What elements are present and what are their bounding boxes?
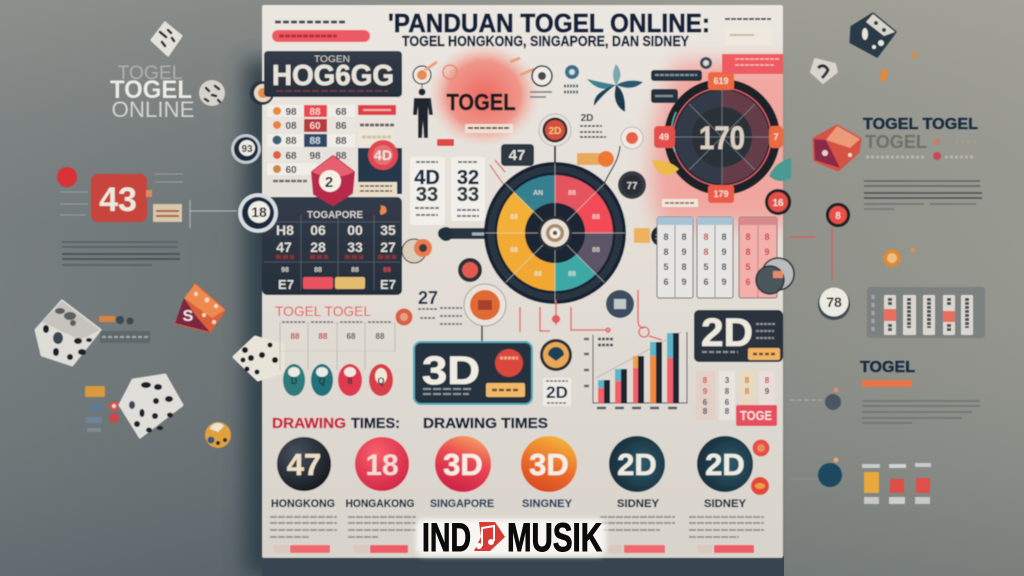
table mid: 9: [721, 277, 727, 287]
text blocks: column descriptions: [270, 517, 764, 537]
panel: dark TOGAPORE grid: 35: [380, 222, 396, 238]
heading: togel online: TOGEL: [118, 63, 182, 84]
circle: 2D sidney: [609, 436, 665, 510]
panel: dark TOGAPORE grid: E7: [380, 277, 396, 292]
circle: 2D sidney second: 2D: [705, 447, 745, 482]
title: TOGEL HONGKONG, SINGAPORE, DAN SIDNEY: [402, 33, 689, 50]
chart: four column balls: [280, 322, 395, 396]
table: number rows: 68: [335, 107, 347, 118]
chart: main wheel: 88: [592, 214, 600, 221]
text block: lower right: [862, 401, 980, 423]
table pink: 9: [764, 247, 770, 257]
callout: 43 red block: [57, 167, 237, 228]
panel: dark TOGAPORE grid: E7: [278, 277, 294, 292]
heading: togel right lower: TOGEL: [860, 359, 915, 376]
icon: red die with 2: [312, 156, 354, 205]
button: TOGE: [736, 405, 777, 426]
table mid: 8: [703, 247, 709, 257]
heading: drawing times 1: [272, 415, 400, 432]
icon: small orange die: [205, 422, 231, 448]
chart: four column balls: 88: [319, 332, 328, 341]
icon: red die right: [814, 126, 860, 170]
table pink: 8: [764, 232, 770, 242]
table mid: 8: [721, 262, 727, 272]
chart: four column balls: 68: [347, 332, 356, 341]
table: number rows: 86: [335, 121, 347, 132]
icon: ball 18 with connector: 18: [251, 204, 267, 220]
small label strip: [99, 316, 150, 343]
text block: 2D note: [580, 113, 606, 137]
circle: 3D singapore: SINGAPORE: [430, 498, 494, 510]
title: 'PANDUAN TOGEL ONLINE:: [388, 8, 710, 38]
badge: 2D ball with card: 2D: [546, 383, 568, 402]
chart: main wheel: 88: [568, 271, 576, 278]
circle: 47 hongkong: 47: [287, 447, 321, 482]
icon: navy die: [851, 14, 895, 56]
table: number rows: 08: [285, 121, 297, 132]
panel: dark TOGAPORE grid: [262, 197, 402, 295]
circle: 2D sidney: SIDNEY: [617, 498, 660, 510]
chart: red dial: [664, 79, 780, 195]
panel: 2D dark: 2D: [701, 311, 753, 355]
card: 4D 33: [410, 157, 445, 225]
card: 32 33: 32: [457, 167, 479, 189]
icon: red ball right column: [790, 203, 850, 280]
heading: faded togel: [865, 132, 977, 160]
table: mini numbers: 6: [703, 398, 708, 407]
heading: togel online: ONLINE: [112, 97, 194, 122]
table blue: 8: [681, 232, 687, 242]
table pink: 8: [745, 232, 751, 242]
panel: dark TOGAPORE grid: TOGAPORE: [307, 210, 363, 221]
right column: floating decorations: [790, 14, 985, 504]
table: number rows: 88: [309, 136, 321, 147]
icon: white small die: [811, 59, 837, 83]
icon: leaves: [652, 158, 791, 181]
dial buttons: [654, 72, 783, 203]
label: 47: [490, 144, 534, 185]
icon: red ball right edge: 16: [772, 198, 784, 209]
icons: orange sparks: [879, 52, 917, 82]
circle: 18 hongakong: 18: [365, 449, 399, 482]
chart: four column balls: 8: [347, 376, 353, 386]
circle: 3D singney: SINGNEY: [522, 498, 573, 510]
panel: gray cards: [867, 287, 985, 338]
icon: teal ball: [790, 458, 842, 487]
dial buttons: 179: [713, 189, 729, 199]
circle: 3D singapore: [430, 436, 494, 510]
text block: right description: [864, 181, 982, 209]
heading: togel online: [110, 63, 194, 122]
chart: four column balls: D: [291, 376, 298, 386]
title: [388, 8, 710, 50]
circle: 18 hongakong: HONGAKONG: [346, 498, 414, 510]
icon: die centre left: [234, 337, 283, 380]
table blue: 9: [681, 277, 687, 287]
panel: 3D: 3D: [422, 349, 480, 393]
circle: 3D singney: [521, 436, 577, 510]
icons: small red coins: [751, 440, 770, 495]
table: number rows: 88: [335, 136, 347, 147]
dial buttons: 49: [659, 132, 669, 142]
chart: main wheel: 88: [510, 247, 518, 254]
circle: 18 hongakong: [346, 437, 414, 510]
icon: gray circle near wheel: [606, 290, 634, 318]
chart: main wheel: 88: [592, 247, 600, 254]
table: mini numbers: [696, 371, 775, 420]
table blue: 8: [663, 232, 669, 242]
table: mini numbers: 8: [765, 376, 770, 385]
small legend group: [85, 386, 119, 432]
icon: ball 93: [231, 134, 261, 164]
table mid: [697, 217, 733, 298]
icon: person with badge: [413, 66, 433, 138]
chart: main wheel: [484, 162, 626, 304]
table: number rows: 98: [285, 107, 297, 118]
table: mini numbers: 9: [703, 387, 708, 396]
heading: togel online: TOGEL: [110, 76, 192, 104]
heading: drawing times 2: DRAWING TIMES: [423, 415, 548, 432]
panel: dark TOGAPORE grid: 88: [383, 267, 391, 274]
card: 2D 27: [418, 288, 462, 324]
table: number rows: 88: [335, 151, 347, 162]
table: mini numbers: 6: [725, 398, 730, 407]
icons: header circles: [530, 65, 579, 97]
chart: four column balls: Q: [377, 376, 385, 386]
table blue: 9: [681, 247, 687, 257]
table: number rows: 60: [309, 121, 321, 132]
callout: orange pill and buttons: [577, 127, 646, 199]
icon: red orange die: [175, 284, 225, 332]
chart: four column balls: Q: [318, 376, 326, 386]
logo: indomusik: [416, 516, 606, 560]
heading: togel togel right: TOGEL TOGEL: [863, 116, 978, 133]
panel: dark TOGAPORE grid: 33: [347, 239, 363, 255]
icon: magnifier cluster: [756, 258, 794, 294]
card: 2D 27: 27: [418, 288, 438, 308]
table mid: 6: [703, 277, 709, 287]
panel: dark HOG header: TOGEN: [314, 54, 350, 64]
panel: 2D dark: [694, 310, 783, 362]
table pink: 6: [745, 277, 751, 287]
panel: main poster sheet: [262, 5, 800, 558]
icon: small navy ball: [790, 388, 841, 410]
card: 4D 33: 33: [416, 184, 438, 206]
table: number rows: 60: [285, 165, 297, 176]
chart: four column balls: 88: [291, 332, 300, 341]
icon: photo ball: [464, 284, 506, 342]
heading: faded togel: TOGEL: [865, 132, 927, 152]
chart: main wheel: 88: [534, 271, 542, 278]
icon: red die with 2: 2: [325, 174, 333, 191]
panel: dark TOGAPORE grid: 88: [314, 267, 322, 274]
circle: 47 hongkong: [271, 437, 335, 510]
left column: floating decorations: [36, 23, 283, 448]
icon: large white die: [36, 301, 100, 365]
card: 32 33: 33: [457, 184, 479, 206]
table mid: 5: [703, 262, 709, 272]
chart: three color cards: [862, 463, 931, 504]
panel: dark TOGAPORE grid: 27: [380, 239, 396, 255]
icon: white die lower: [120, 375, 182, 437]
table: mini numbers: 3: [725, 376, 730, 385]
badge: 2D orange disc: 2D: [549, 126, 561, 137]
table: mini numbers: 9: [765, 387, 770, 396]
table: number rows: 68: [285, 151, 297, 162]
panel: 3D: [414, 342, 532, 404]
icon: orange coin: [883, 248, 916, 267]
chart: main wheel: AN: [533, 190, 543, 197]
buttons: column actions: [274, 545, 754, 553]
tables: three result columns: [657, 217, 777, 298]
circle: 2D sidney second: [697, 436, 753, 510]
top left strap: [272, 22, 370, 42]
table: number rows: 98: [309, 151, 321, 162]
table pink: [739, 217, 777, 298]
badge: 2D orange disc: [539, 114, 571, 166]
text block: left description: [62, 242, 180, 265]
table: number rows: [267, 105, 355, 181]
icon: orange ball panel edge: [250, 81, 274, 105]
panel: dark TOGAPORE grid: 28: [310, 239, 326, 255]
table pink: 9: [764, 277, 770, 287]
panel: dark TOGAPORE grid: 47: [276, 239, 292, 255]
table: mini numbers: 8: [745, 376, 750, 385]
table: mini numbers: 8: [725, 407, 730, 416]
logo: indomusik: IND: [422, 516, 471, 560]
connector: wheel to table: [634, 226, 671, 246]
panel: dark TOGAPORE grid: 06: [310, 222, 326, 238]
chart: four column balls: 88: [376, 332, 385, 341]
connector: wheel to table: 188: [655, 234, 667, 241]
icon: red ball 4D: 4D: [374, 147, 392, 163]
icon: ball 78: [818, 288, 850, 320]
icon: red ball 4D: [368, 140, 398, 170]
table blue: [657, 217, 693, 298]
table mid: 9: [721, 247, 727, 257]
circle: 2D sidney: 2D: [617, 447, 657, 482]
heading: togel right lower: [860, 359, 915, 387]
panel: dark HOG header: [264, 51, 402, 97]
label: pink strip: [662, 199, 698, 207]
icon: red orange die: S: [183, 308, 194, 325]
dial buttons: 619: [713, 76, 729, 86]
top right card: [722, 19, 783, 74]
heading: drawing times 1: DRAWING: [272, 415, 346, 432]
table blue: 5: [663, 262, 669, 272]
chart: main wheel: 88: [510, 214, 518, 221]
connector strip dark: [402, 227, 498, 282]
text block: 2D note: 2D: [581, 113, 593, 124]
panel: dark TOGAPORE grid: 00: [347, 222, 363, 238]
logo: indomusik: MUSIK: [507, 516, 602, 560]
icon: ball 18 with connector: [238, 193, 278, 233]
icon: ball 78: 78: [826, 294, 842, 310]
icon: round die: [199, 80, 225, 106]
table blue: 8: [663, 247, 669, 257]
heading: togel togel: TOGEL TOGEL: [275, 303, 371, 319]
callout: orange pill and buttons: 77: [626, 181, 638, 192]
card: 4D 33: 4D: [414, 167, 440, 189]
circle: 3D singney: 3D: [529, 447, 569, 482]
icon: ball 93: 93: [241, 144, 253, 155]
table pink: 5: [745, 262, 751, 272]
panel: dark TOGAPORE grid: 88: [351, 267, 359, 274]
circle: 2D sidney second: SIDNEY: [704, 498, 747, 510]
heading: drawing times 1: TIMES:: [351, 415, 400, 432]
dial side labels: [651, 57, 712, 103]
table side notes: [355, 105, 402, 196]
chart: bar chart: [584, 332, 687, 408]
table blue: 6: [663, 277, 669, 287]
table pink: 8: [764, 262, 770, 272]
table: mini numbers: 8: [703, 376, 708, 385]
table mid: 8: [721, 232, 727, 242]
dial buttons: 7: [773, 132, 779, 142]
panel: dark TOGAPORE grid: 98: [281, 267, 289, 274]
icon: pink blob with togel label: [425, 43, 540, 147]
icon: small die top: [152, 23, 181, 55]
label: 47: 47: [509, 147, 525, 164]
circle: 3D singapore: 3D: [443, 447, 483, 482]
table: number rows: 88: [309, 107, 321, 118]
table: mini numbers: 8: [745, 387, 750, 396]
icon: red ball right column: 8: [835, 211, 841, 222]
table: mini numbers: 8: [703, 407, 708, 416]
icon: small red ball: [396, 308, 412, 326]
circle: 47 hongkong: HONGKONG: [271, 498, 335, 510]
chart: red dial: 170: [699, 120, 745, 156]
icon: red ball right edge: [765, 189, 791, 215]
callout: 43 red block: 43: [99, 181, 137, 219]
table mid: 8: [703, 232, 709, 242]
panel: dark HOG header: HOG6GG: [272, 60, 394, 92]
table pink: 8: [745, 247, 751, 257]
card: 32 33: [451, 157, 485, 221]
red connector lines: [520, 290, 662, 340]
panel: dark TOGAPORE grid: H8: [276, 222, 294, 238]
table: number rows: 88: [285, 136, 297, 147]
icon: pink blob with togel label: TOGEL: [446, 89, 516, 115]
table blue: 8: [681, 262, 687, 272]
badge: 2D ball with card: [540, 339, 572, 406]
icon: teal star: [587, 64, 643, 112]
button: TOGE: TOGE: [740, 408, 772, 423]
chart: main wheel: 88: [568, 190, 576, 197]
table: mini numbers: 8: [725, 387, 730, 396]
